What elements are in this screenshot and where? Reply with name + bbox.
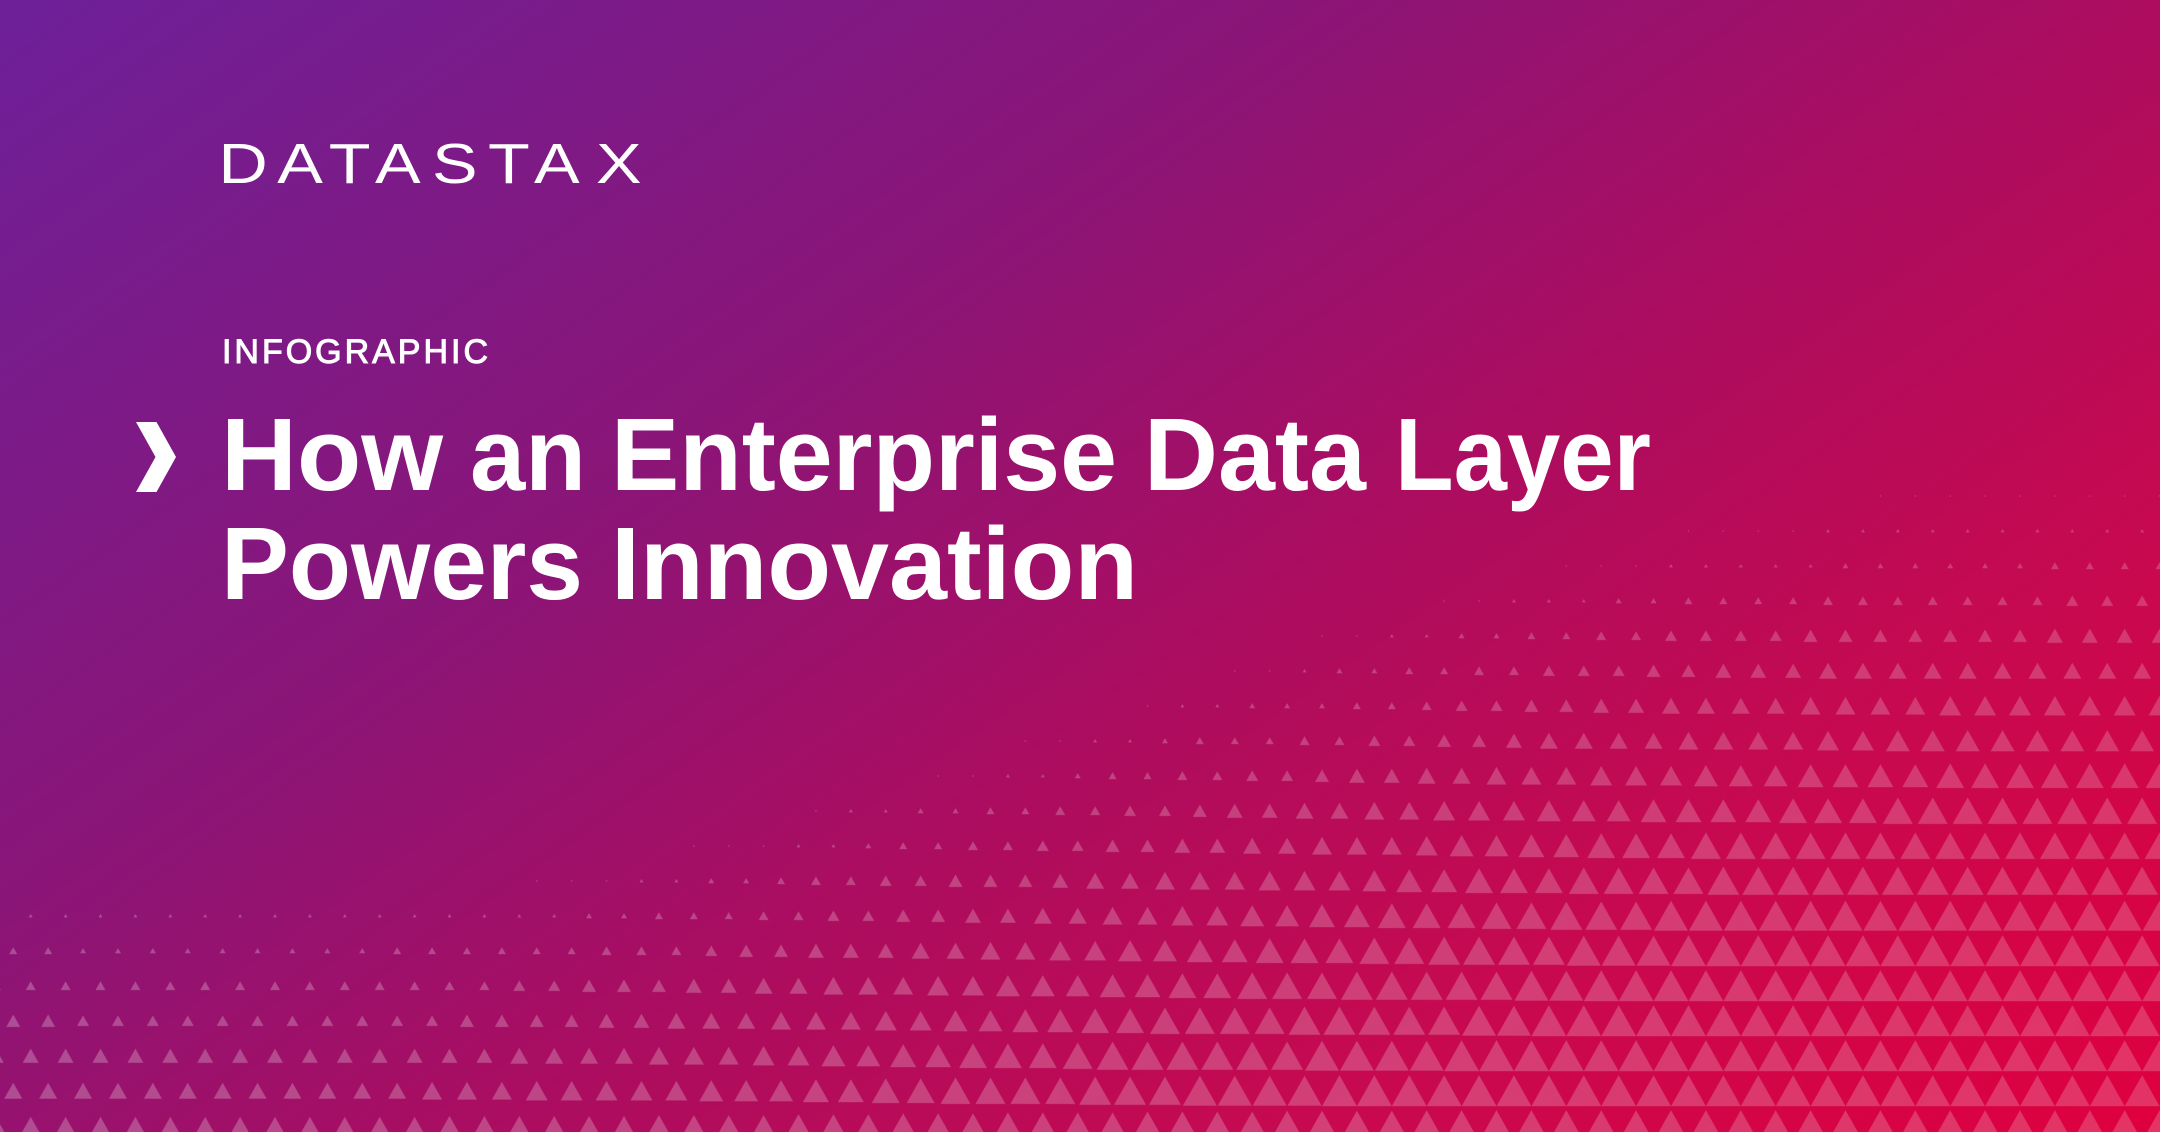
title: How bbox=[221, 397, 444, 512]
title bbox=[221, 397, 1651, 621]
eyebrow label: INFOGRAPHIC bbox=[222, 333, 488, 371]
logo wordmark: DATASTAX bbox=[218, 132, 642, 196]
title: Powers bbox=[221, 506, 583, 621]
triangle halftone pattern bbox=[0, 478, 2160, 1132]
icon: chevron bbox=[136, 422, 176, 492]
title: Data bbox=[1144, 397, 1367, 512]
title: Enterprise bbox=[611, 397, 1117, 512]
title: an bbox=[470, 397, 586, 512]
title: Layer bbox=[1395, 397, 1651, 512]
title: Innovation bbox=[611, 506, 1138, 621]
